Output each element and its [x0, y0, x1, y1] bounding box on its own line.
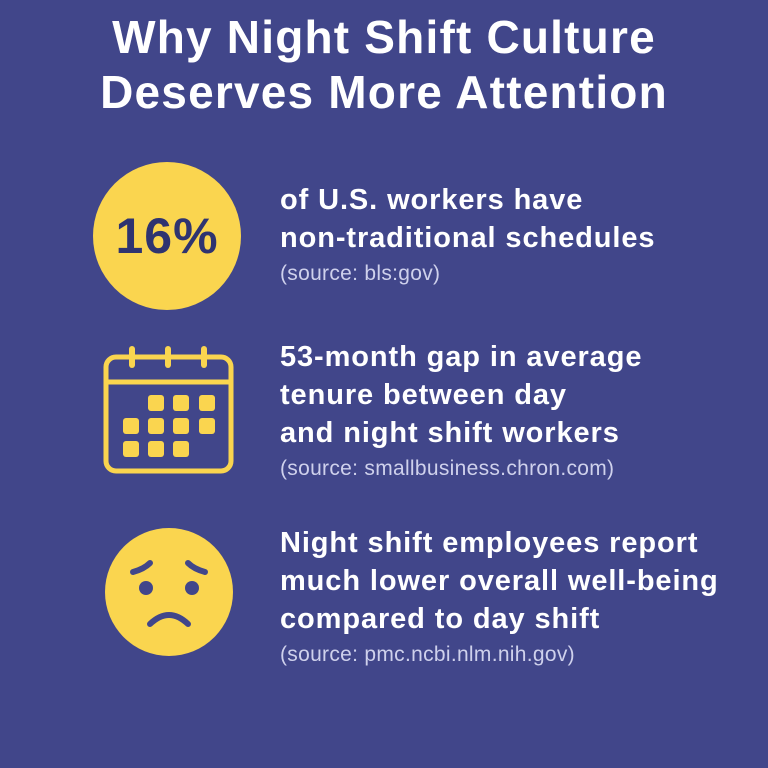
- text block: stat 2: 53-month gap in average: [280, 341, 642, 373]
- icon: 16% circle: [93, 162, 241, 310]
- text block: stat 2: (source: smallbusiness.chron.com): [280, 457, 614, 480]
- text block: stat 3: [280, 527, 719, 666]
- icon: sad face: [105, 528, 233, 656]
- text block: stat 3: compared to day shift: [280, 603, 600, 635]
- title: Deserves More Attention: [100, 66, 668, 118]
- text block: stat 1: non-traditional schedules: [280, 222, 655, 254]
- title: Why Night Shift Culture: [112, 11, 656, 63]
- text block: stat 2: tenure between day: [280, 379, 567, 411]
- icon: calendar: [104, 346, 234, 474]
- text block: stat 2: and night shift workers: [280, 417, 620, 449]
- text block: stat 1: (source: bls:gov): [280, 262, 440, 285]
- text block: stat 3: much lower overall well-being: [280, 565, 719, 597]
- text block: stat 3: (source: pmc.ncbi.nlm.nih.gov): [280, 643, 575, 666]
- title: [100, 11, 668, 118]
- text block: stat 1: of U.S. workers have: [280, 184, 583, 216]
- text block: stat 2: [280, 341, 642, 480]
- text block: stat 3: Night shift employees report: [280, 527, 698, 559]
- text block: stat 1: [280, 184, 655, 285]
- icon: 16% circle: 16%: [115, 208, 219, 264]
